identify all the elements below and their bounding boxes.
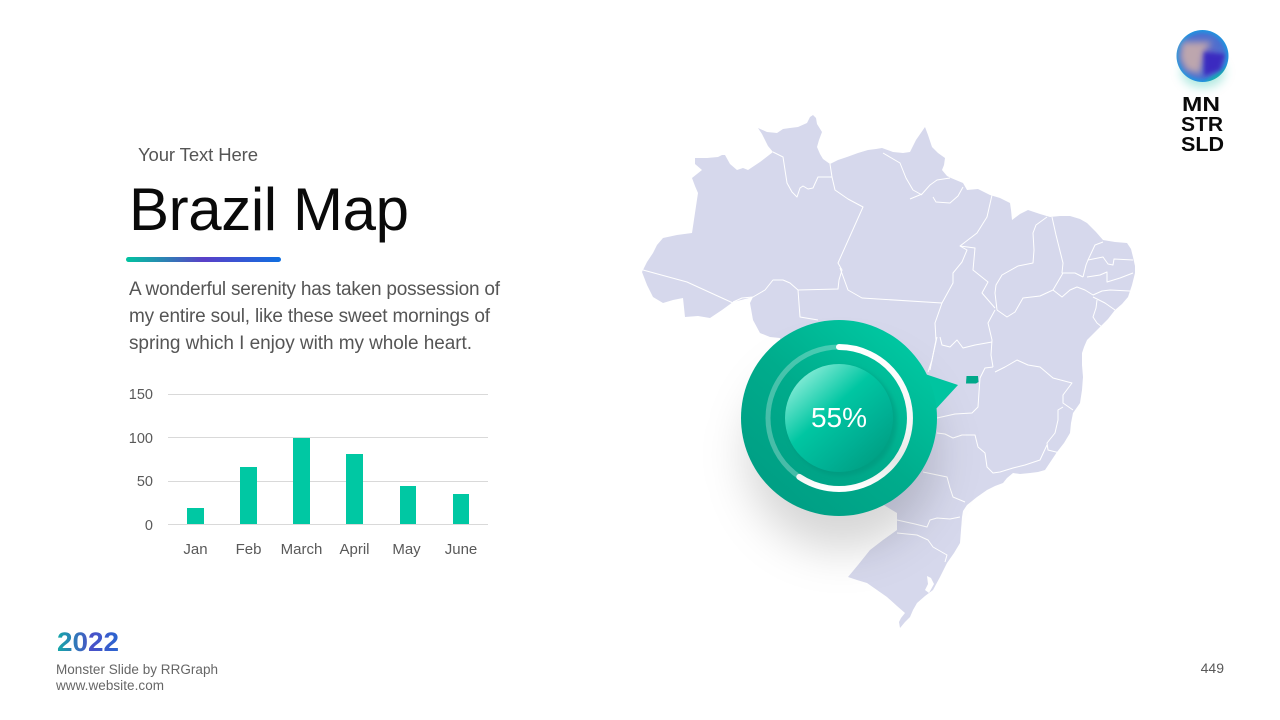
- inner disc: [785, 364, 893, 472]
- pointer: [925, 374, 958, 410]
- bar chart: Feb: [236, 541, 261, 558]
- map of Brazil: [642, 115, 1135, 628]
- logo: wordmark: MN: [1182, 93, 1220, 116]
- soft shadow: [747, 360, 937, 550]
- logo: wordmark: SLD: [1181, 133, 1224, 156]
- lagoon: [925, 576, 934, 593]
- footer credits: [55, 662, 218, 693]
- bar chart: May: [392, 541, 421, 558]
- logo: sphere: [1176, 30, 1232, 88]
- state borders: [643, 152, 1133, 562]
- page number: 449: [1201, 660, 1224, 676]
- bar chart: March: [281, 541, 322, 558]
- bar chart: June: [445, 541, 477, 558]
- ring track: [768, 347, 910, 489]
- bar chart: 0: [145, 518, 153, 534]
- bar chart: Jan: [183, 541, 208, 558]
- body text: my entire soul, like these sweet mornings of: [129, 306, 491, 327]
- title underline: [126, 257, 281, 262]
- bar chart: 150: [129, 387, 153, 403]
- logo: wordmark: STR: [1181, 113, 1223, 136]
- bar chart: 100: [129, 431, 153, 447]
- logo: wordmark: [1181, 93, 1224, 156]
- footer credits: www.website.com: [55, 678, 164, 693]
- body text: A wonderful serenity has taken possession of: [129, 279, 501, 300]
- subtitle: Your Text Here: [138, 144, 258, 165]
- body text: [129, 279, 501, 354]
- footer year: 2022: [57, 627, 119, 657]
- highlighted state marker: [966, 376, 978, 384]
- callout: 55% gauge: [741, 320, 958, 550]
- inner disc shade: [787, 366, 897, 476]
- bar chart: [129, 387, 488, 558]
- ring progress: [799, 347, 910, 489]
- percentage: 55%: [811, 402, 867, 433]
- title: Brazil Map: [129, 176, 409, 243]
- outer disc: [741, 320, 937, 516]
- bar chart: 50: [137, 474, 153, 490]
- footer credits: Monster Slide by RRGraph: [56, 662, 218, 677]
- country shape: [642, 115, 1135, 628]
- bar chart: April: [339, 541, 370, 558]
- body text: spring which I enjoy with my whole heart.: [129, 333, 472, 354]
